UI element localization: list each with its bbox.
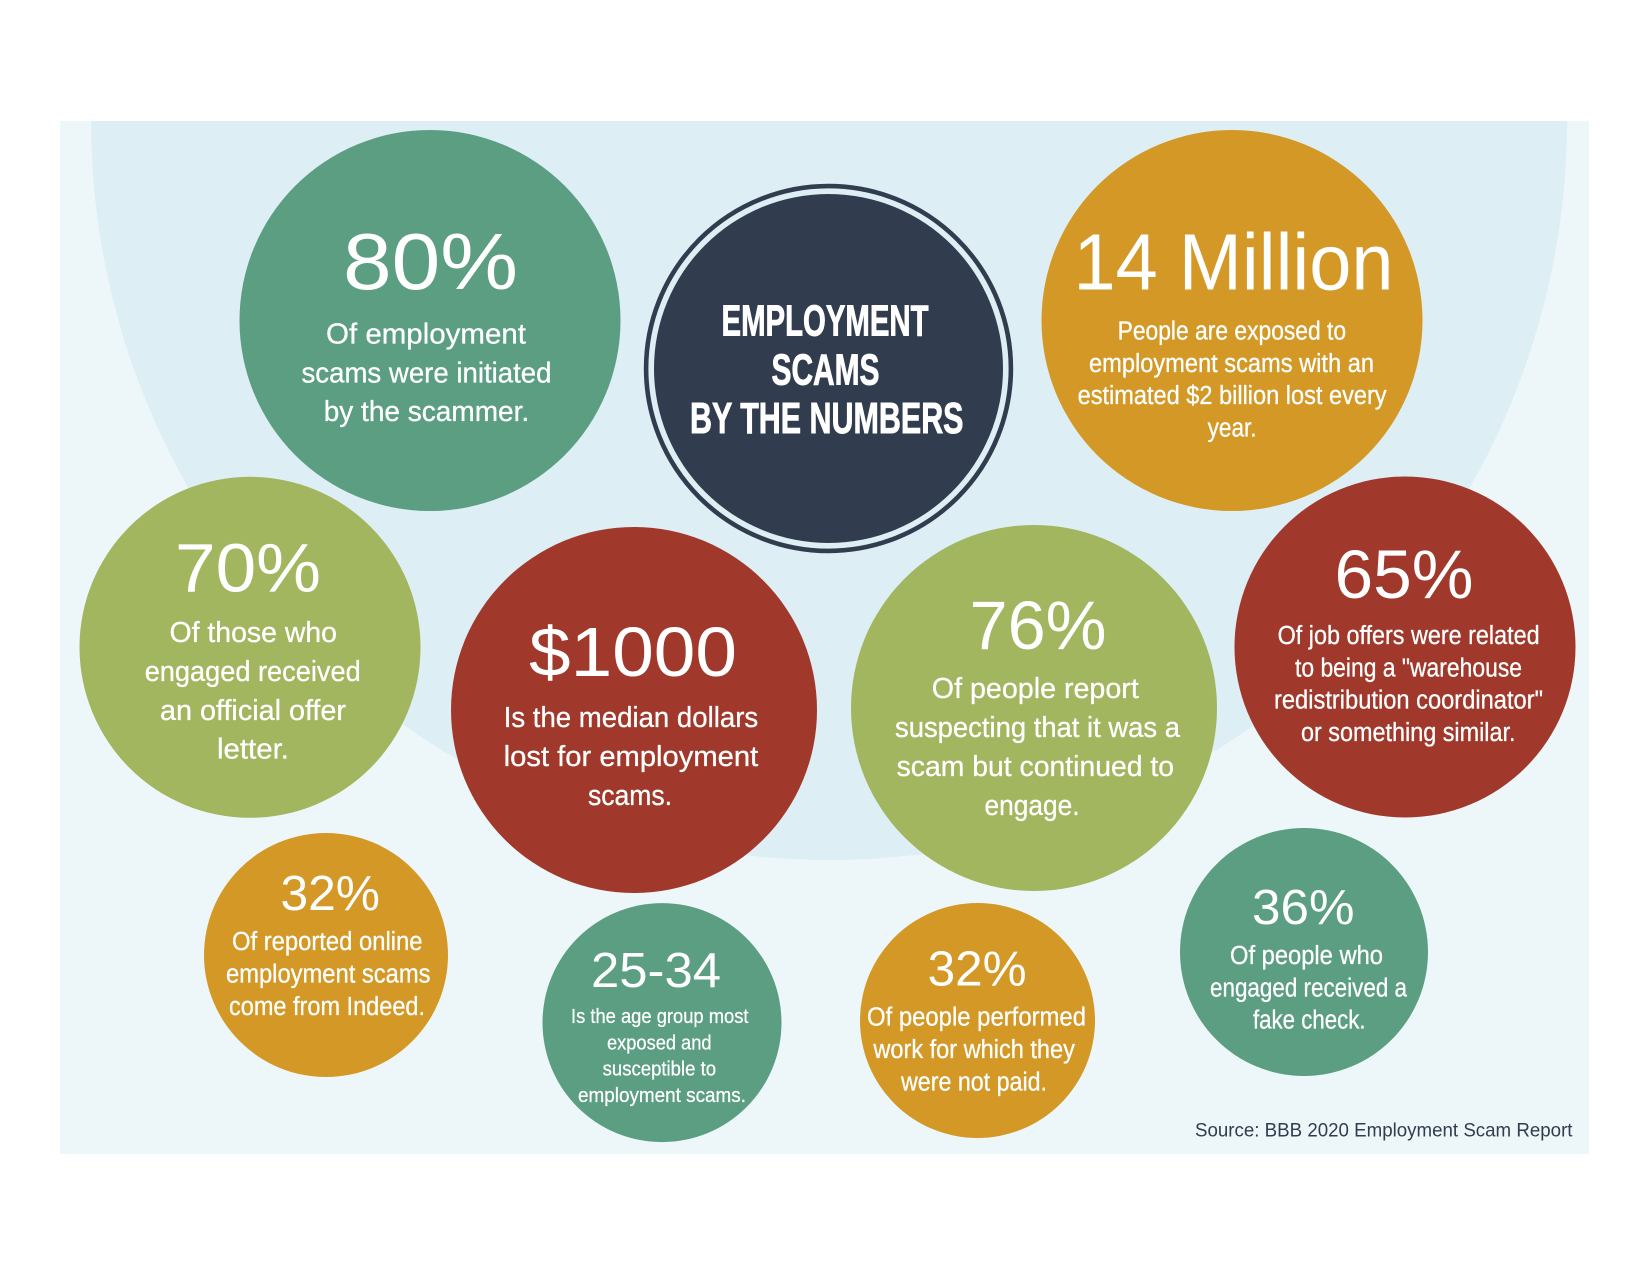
panel: 65% stat: to being a "warehouse bbox=[1295, 654, 1522, 682]
panel: background bbox=[60, 121, 1589, 1154]
panel: 25-34 stat: Is the age group most bbox=[571, 1005, 749, 1028]
panel: 32% Indeed stat: Of reported online bbox=[232, 928, 422, 956]
panel: 36% stat: Of people who bbox=[1230, 942, 1383, 970]
panel: 32% unpaid work stat: were not paid. bbox=[900, 1068, 1047, 1096]
panel: 70% stat: engaged received bbox=[145, 656, 361, 688]
panel: 14 Million stat: employment scams with an bbox=[1089, 350, 1374, 378]
panel: 65% stat: 65% bbox=[1334, 536, 1474, 613]
title bbox=[690, 296, 964, 443]
background half circle bbox=[91, 121, 1567, 860]
source note: Source: BBB 2020 Employment Scam Report bbox=[1195, 1120, 1573, 1142]
title: BY THE NUMBERS bbox=[690, 394, 964, 443]
panel: 76% stat: Of people report bbox=[932, 673, 1139, 705]
panel: 14 Million stat: People are exposed to bbox=[1118, 318, 1346, 346]
panel: 70% stat: 70% bbox=[175, 530, 321, 606]
panel: 32% Indeed stat bbox=[204, 833, 448, 1077]
panel: 76% stat: 76% bbox=[970, 587, 1106, 664]
title: EMPLOYMENT bbox=[722, 296, 929, 346]
panel: 32% Indeed stat: employment scams bbox=[226, 960, 430, 988]
panel: 70% stat: an official offer bbox=[160, 695, 347, 727]
panel: 32% unpaid work stat: work for which they bbox=[872, 1036, 1075, 1064]
panel: 36% stat: engaged received a bbox=[1210, 974, 1408, 1002]
panel: 70% stat: Of those who bbox=[170, 617, 337, 649]
panel: 32% Indeed stat: come from Indeed. bbox=[229, 993, 425, 1021]
panel: 25-34 stat: susceptible to bbox=[603, 1058, 716, 1080]
panel: 65% stat: Of job offers were related bbox=[1278, 622, 1540, 650]
panel: 76% stat: scam but continued to bbox=[897, 751, 1174, 783]
panel: 14 Million stat bbox=[1042, 130, 1422, 511]
panel: 65% stat: or something similar. bbox=[1301, 719, 1516, 747]
panel: 25-34 stat: exposed and bbox=[607, 1032, 712, 1054]
panel: 80% stat: 80% bbox=[343, 217, 518, 306]
panel: 32% Indeed stat: 32% bbox=[280, 867, 380, 921]
panel: 70% stat: letter. bbox=[217, 734, 289, 766]
panel: $1000 stat: $1000 bbox=[529, 613, 737, 691]
panel: 32% unpaid work stat: Of people performed bbox=[867, 1004, 1086, 1032]
panel: 80% stat: by the scammer. bbox=[324, 396, 529, 428]
panel: 14 Million stat: year. bbox=[1208, 414, 1257, 442]
panel: 36% stat bbox=[1180, 828, 1428, 1076]
panel: 80% stat: Of employment bbox=[326, 318, 526, 350]
panel: 36% stat: fake check. bbox=[1253, 1006, 1366, 1034]
panel: 14 Million stat: 14 Million bbox=[1074, 218, 1394, 306]
panel: $1000 stat: scams. bbox=[588, 780, 672, 812]
panel: 65% stat: redistribution coordinator" bbox=[1274, 686, 1543, 714]
panel: 76% stat bbox=[851, 525, 1217, 891]
panel: 80% stat bbox=[240, 130, 620, 511]
panel: 32% unpaid work stat: 32% bbox=[928, 942, 1027, 996]
panel: $1000 stat: lost for employment bbox=[504, 741, 758, 773]
panel: 80% stat: scams were initiated bbox=[302, 358, 552, 390]
panel: 65% stat bbox=[1234, 476, 1576, 818]
panel: 25-34 stat bbox=[542, 903, 782, 1142]
panel: 76% stat: suspecting that it was a bbox=[895, 712, 1180, 744]
panel: 36% stat: 36% bbox=[1252, 881, 1354, 935]
panel: 32% unpaid work stat bbox=[860, 903, 1095, 1138]
panel: 25-34 stat: employment scams. bbox=[578, 1084, 746, 1107]
panel: $1000 stat bbox=[451, 527, 817, 893]
panel: 70% stat bbox=[80, 477, 420, 818]
panel: 14 Million stat: estimated $2 billion lost every bbox=[1078, 382, 1387, 410]
panel: 76% stat: engage. bbox=[984, 790, 1080, 822]
title: SCAMS bbox=[772, 346, 880, 394]
panel: title badge bbox=[646, 186, 1011, 551]
panel: 25-34 stat: 25-34 bbox=[591, 944, 721, 998]
panel: $1000 stat: Is the median dollars bbox=[504, 702, 758, 734]
